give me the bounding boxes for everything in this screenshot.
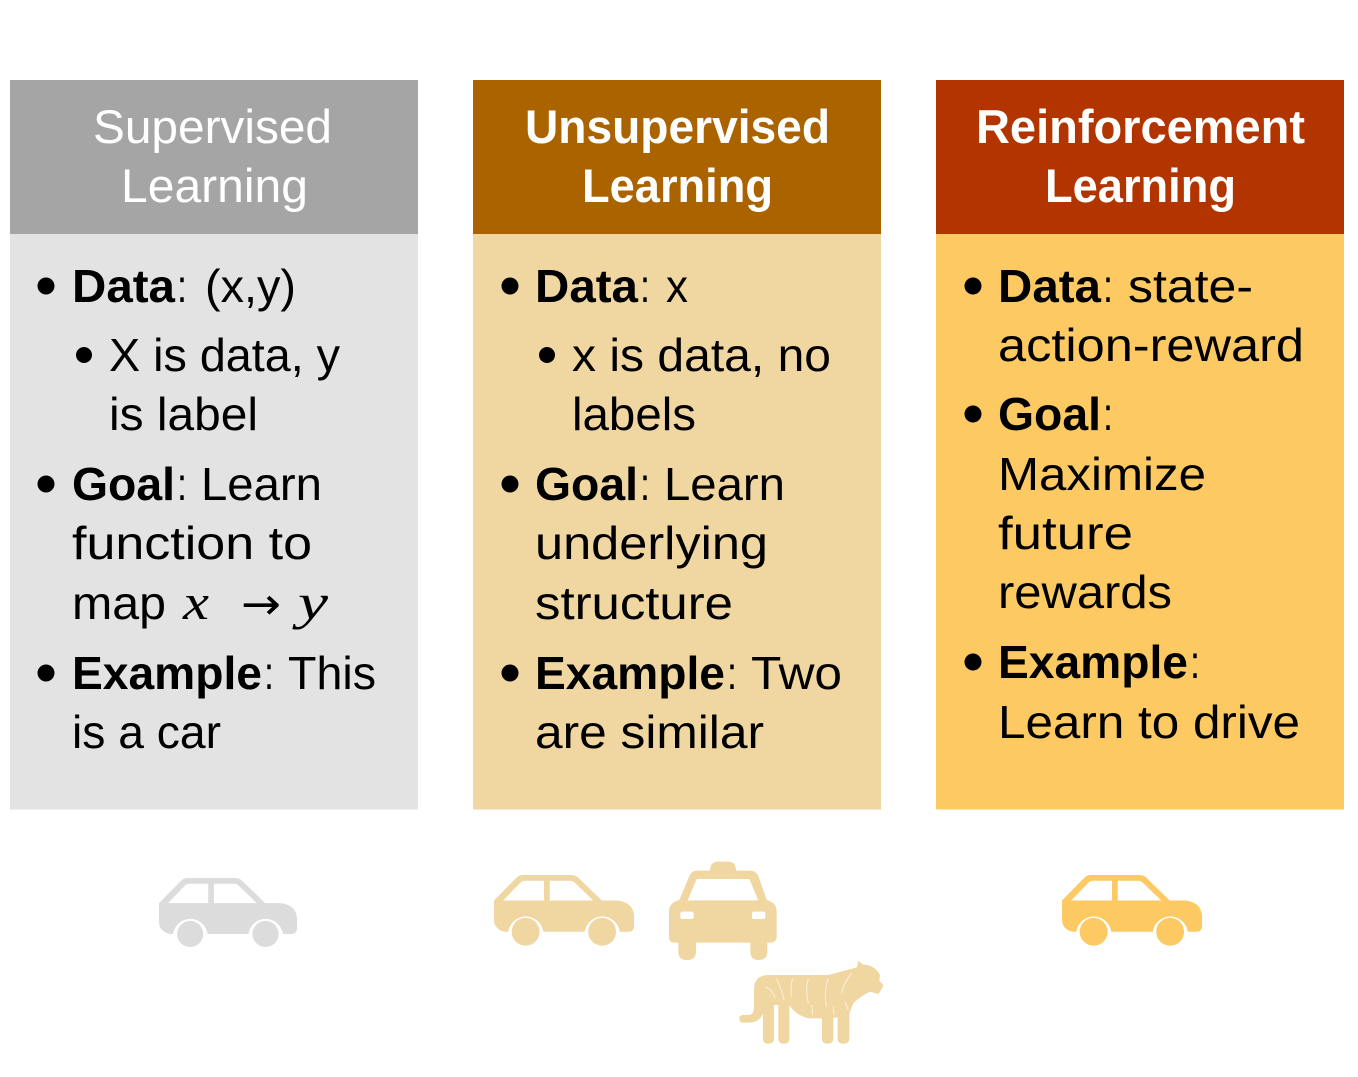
unsupervised text: example: :	[727, 647, 737, 699]
unsupervised header: Unsupervised	[525, 100, 830, 153]
unsupervised text: example: Two	[751, 647, 842, 699]
icon: tan car	[494, 875, 634, 946]
reinforcement text: goal	[964, 388, 1206, 618]
unsupervised text: data: labels	[572, 388, 696, 440]
panel: reinforcement learning	[936, 80, 1344, 810]
supervised text: goal: →	[241, 579, 281, 630]
unsupervised text: example	[502, 647, 842, 758]
supervised text: goal	[38, 458, 329, 630]
reinforcement text: goal: future	[998, 507, 1133, 559]
supervised header: Supervised	[93, 100, 332, 153]
reinforcement text: data: Data	[998, 260, 1101, 312]
supervised text: goal: function to	[72, 517, 312, 569]
reinforcement text: goal: :	[1103, 388, 1113, 440]
supervised text: goal: y	[291, 574, 329, 630]
unsupervised text: example: are similar	[535, 706, 764, 758]
icon: amber car	[1062, 875, 1202, 946]
unsupervised header: Learning	[582, 159, 773, 212]
reinforcement text: goal: Goal	[998, 388, 1101, 440]
panel: supervised learning	[10, 80, 418, 810]
supervised text: data: :	[177, 260, 187, 312]
reinforcement header: Learning	[1045, 159, 1236, 212]
reinforcement text: data	[964, 260, 1304, 371]
supervised text: example: This	[288, 647, 376, 699]
supervised text: goal: x	[182, 574, 209, 630]
unsupervised text: example: Example	[535, 647, 725, 699]
reinforcement header	[936, 80, 1344, 234]
supervised body background	[10, 234, 418, 810]
unsupervised text: data: :	[640, 260, 650, 312]
icon: gray car	[159, 878, 297, 947]
supervised text: data: (x,y)	[205, 260, 296, 312]
reinforcement text: data: action-reward	[998, 319, 1304, 371]
supervised text: example: Example	[72, 647, 262, 699]
reinforcement text: example: :	[1190, 636, 1200, 688]
reinforcement text: example	[964, 636, 1300, 748]
supervised text: goal: Goal	[72, 458, 175, 510]
unsupervised body background	[473, 234, 881, 810]
reinforcement text: goal: Maximize	[998, 448, 1206, 500]
unsupervised text: data: Data	[535, 260, 638, 312]
unsupervised header	[473, 80, 881, 234]
reinforcement header: Reinforcement	[976, 100, 1305, 153]
unsupervised text: data	[502, 260, 831, 440]
supervised text: example	[38, 647, 376, 758]
panel: unsupervised learning	[473, 80, 881, 810]
supervised header	[10, 80, 418, 234]
unsupervised text: goal: structure	[535, 577, 733, 629]
supervised text: example: :	[264, 647, 274, 699]
unsupervised text: data: x is data, no	[572, 329, 831, 381]
reinforcement text: goal: rewards	[998, 566, 1172, 618]
unsupervised text: goal: Learn	[664, 458, 785, 510]
supervised text: goal: map	[72, 577, 166, 629]
supervised text: data: Data	[72, 260, 175, 312]
unsupervised text: data: x	[666, 260, 688, 312]
supervised text: data	[38, 260, 340, 440]
unsupervised text: goal: :	[640, 458, 650, 510]
unsupervised text: goal	[502, 458, 785, 629]
unsupervised text: goal: Goal	[535, 458, 638, 510]
supervised header: Learning	[121, 159, 308, 212]
reinforcement text: example: Learn to drive	[998, 696, 1300, 748]
reinforcement text: data: state-	[1128, 260, 1253, 312]
supervised text: goal: Learn	[201, 458, 322, 510]
supervised text: data: X is data, y	[109, 329, 340, 381]
supervised text: example: is a car	[72, 706, 221, 758]
reinforcement body background	[936, 234, 1344, 810]
supervised text: goal: :	[177, 458, 187, 510]
unsupervised text: goal: underlying	[535, 517, 768, 569]
icon: taxi	[669, 862, 777, 960]
supervised text: data: is label	[109, 388, 258, 440]
icon: tiger	[739, 961, 883, 1044]
reinforcement text: data: :	[1103, 260, 1113, 312]
reinforcement text: example: Example	[998, 636, 1188, 688]
